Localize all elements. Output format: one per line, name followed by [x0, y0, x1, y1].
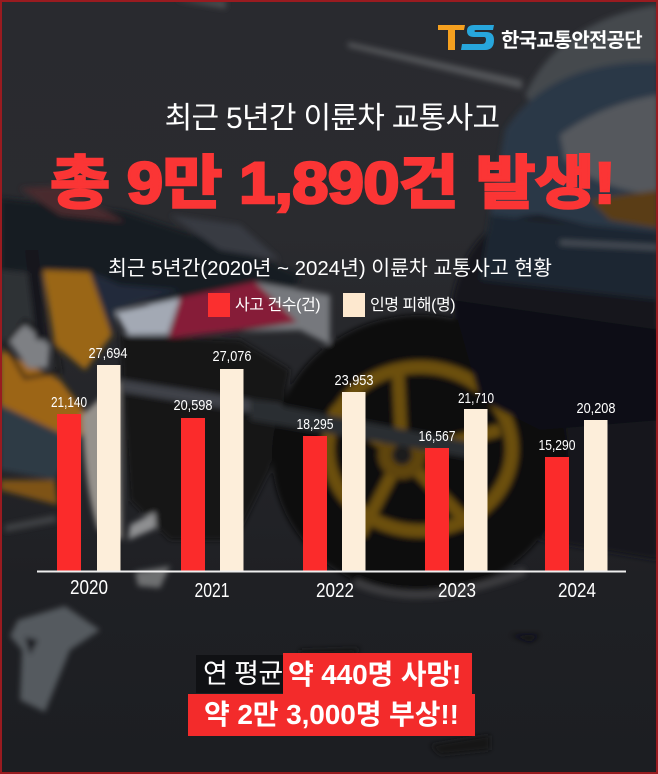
- chart title: 최근 5년간(2020년 ~ 2024년) 이륜차 교통사고 현황: [108, 257, 552, 280]
- 2022 group: 23,953: [334, 372, 374, 389]
- 2023 group: 21,710: [458, 390, 494, 407]
- callout: annual average casualties: [188, 653, 475, 736]
- 2021 group: [174, 348, 252, 602]
- 2020 group: 21,140: [51, 394, 87, 411]
- legend: [208, 293, 455, 317]
- 2024 group: 2024: [558, 580, 596, 602]
- 2020 group: [51, 345, 128, 599]
- 2021 group: 20,598: [174, 397, 212, 414]
- callout red box: injuries: [188, 694, 475, 736]
- 2023 group: [418, 390, 494, 602]
- callout text: injuries: 약 2만 3,000명 부상!!: [204, 699, 459, 730]
- 2024 group: 20,208: [576, 400, 616, 417]
- headline: total accidents: 총 9만 1,890건 발생!: [50, 151, 615, 216]
- 2022 group: 18,295: [296, 416, 334, 433]
- callout line 1 label background: [196, 655, 286, 693]
- legend item: accidents: 사고 건수(건): [235, 297, 320, 314]
- 2021 group: 2021: [194, 580, 230, 602]
- 2023 group: 16,567: [418, 428, 456, 445]
- logo: TS 한국교통안전공단: [438, 25, 642, 52]
- 2020 group: 27,694: [88, 345, 128, 362]
- legend item: accidents: [208, 293, 320, 317]
- legend item: casualties: [343, 293, 455, 317]
- logo mark: TS: [438, 25, 494, 50]
- legend item: casualties: 인명 피해(명): [370, 297, 455, 314]
- callout text: deaths: 약 440명 사망!: [288, 659, 461, 690]
- title line: 최근 5년간 이륜차 교통사고: [165, 102, 499, 135]
- 2021 group: 27,076: [212, 348, 252, 365]
- callout text: annual average: 연 평균: [203, 659, 283, 689]
- 2024 group: 15,290: [538, 437, 576, 454]
- 2022 group: [296, 372, 374, 602]
- 2024 group: [538, 400, 616, 602]
- 2023 group: 2023: [438, 580, 476, 602]
- 2020 group: 2020: [70, 577, 108, 599]
- logo wordmark: 한국교통안전공단: [501, 30, 642, 52]
- callout red box: deaths: [283, 653, 472, 694]
- 2022 group: 2022: [316, 580, 354, 602]
